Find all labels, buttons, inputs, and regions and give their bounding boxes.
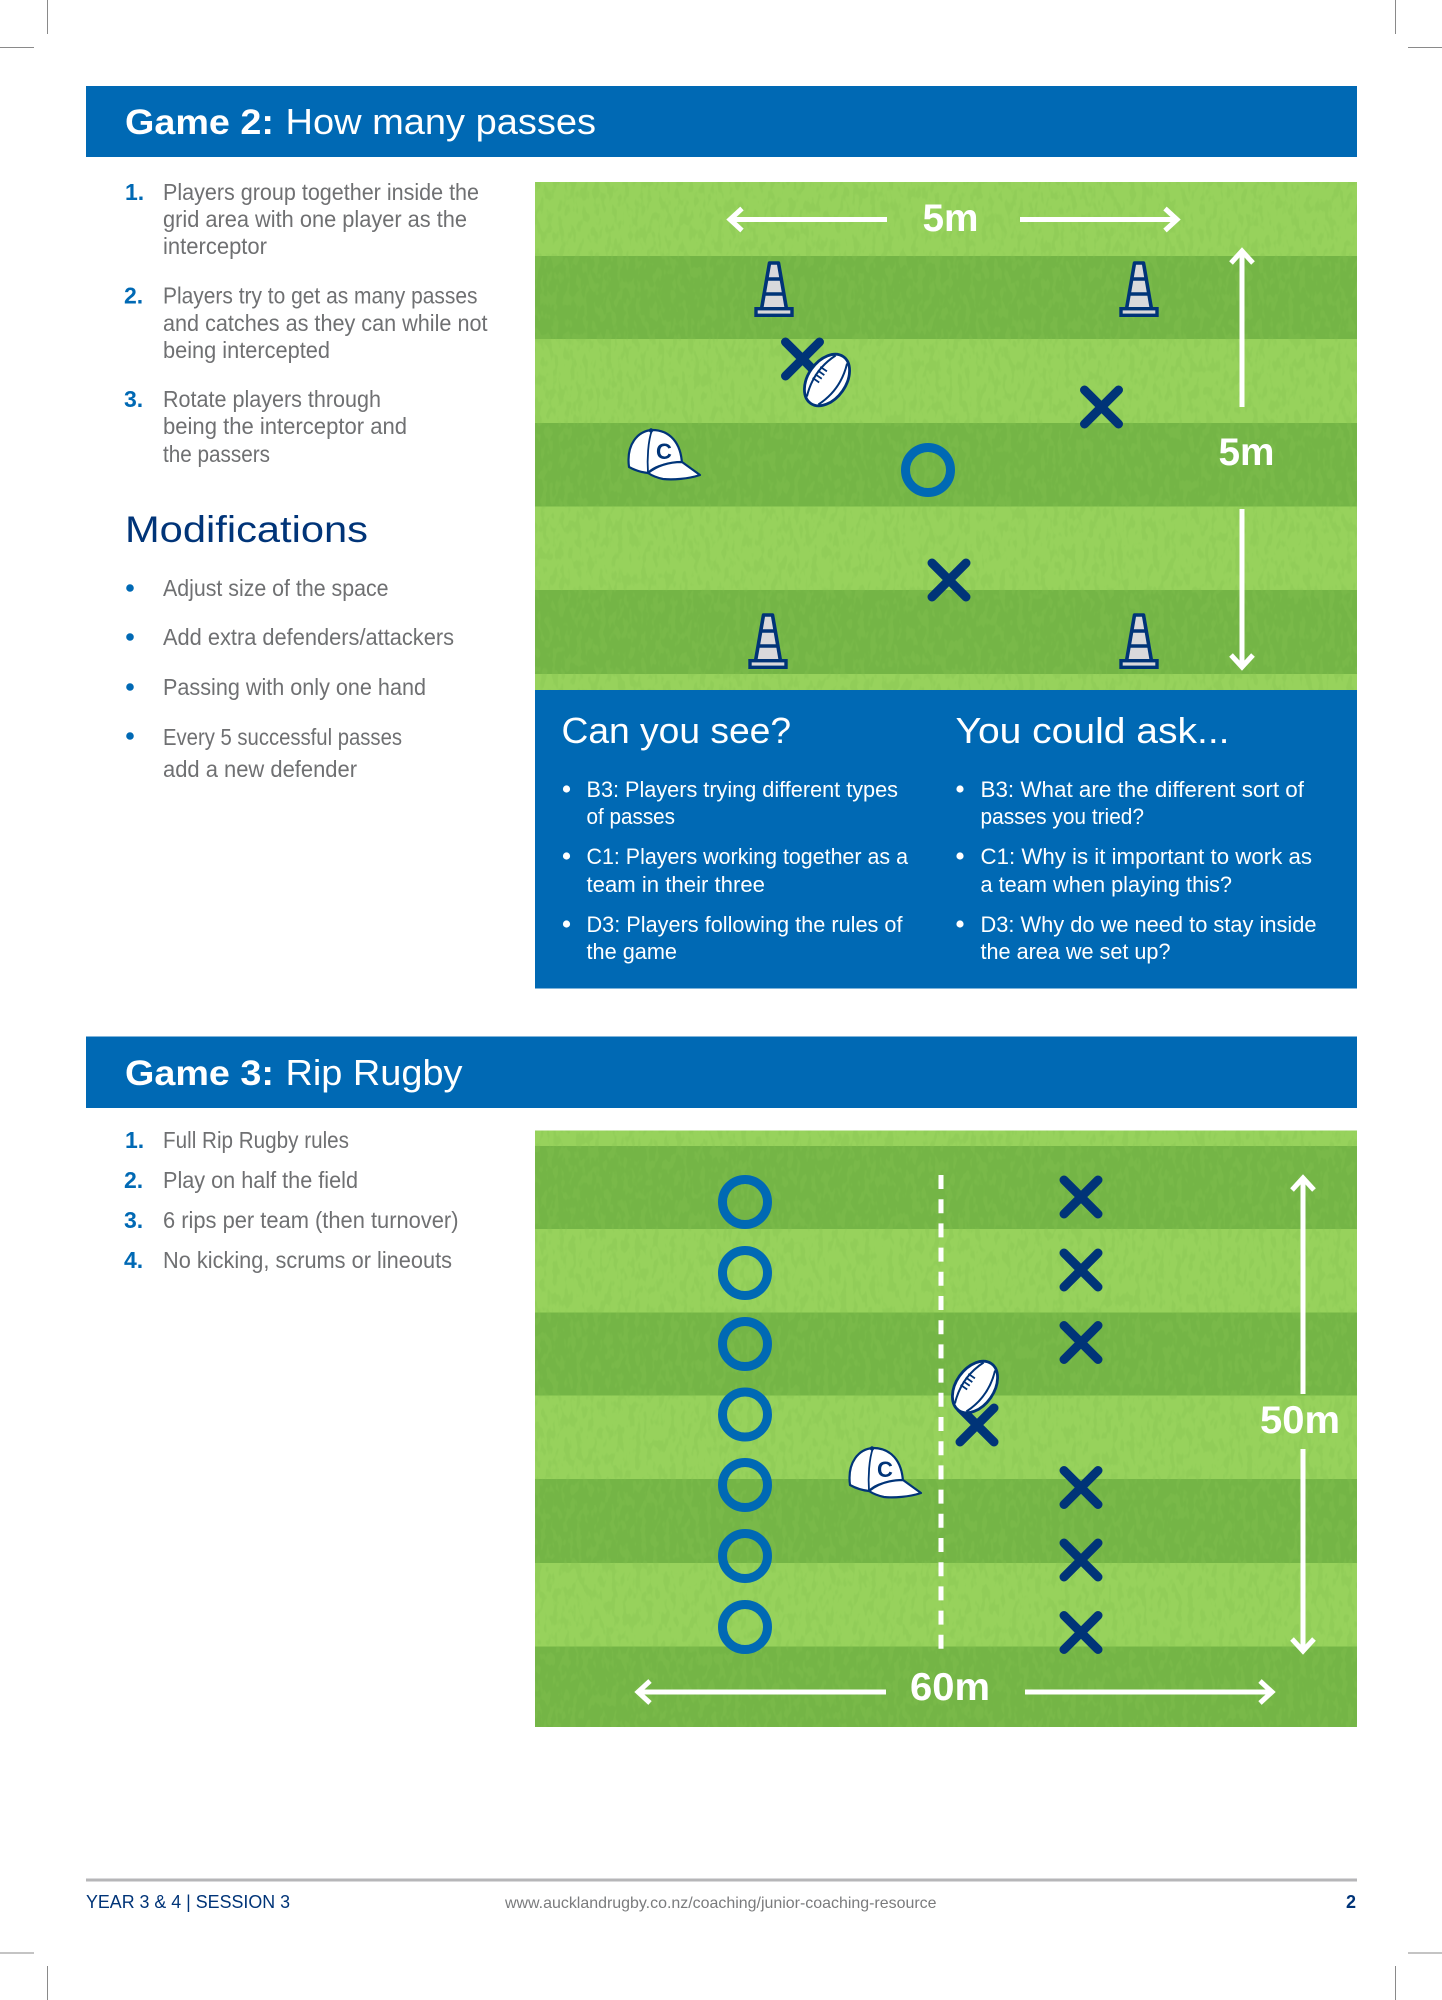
modifications list: add a new defender <box>163 756 357 782</box>
numbered instructions: Game 3: Play on half the field <box>163 1167 358 1193</box>
numbered instructions: Game 3: 4. <box>124 1247 143 1273</box>
icon: coach cap: C <box>877 1457 893 1482</box>
heading banner: Game 3 <box>86 1036 1357 1108</box>
modifications list: Passing with only one hand <box>163 674 426 700</box>
player X <box>1084 390 1118 424</box>
heading: Can you see?: Can you see? <box>562 710 791 751</box>
list: You could ask: B3: What are the different sort of <box>980 777 1305 802</box>
player X with ball <box>960 1408 994 1442</box>
icon: cone top left <box>756 263 792 315</box>
list: Can you see? <box>563 777 908 964</box>
list: Can you see?: the game <box>586 939 677 964</box>
numbered instructions: Game 2: grid area with one player as the <box>163 206 467 232</box>
modifications list: Adjust size of the space <box>163 575 388 601</box>
arrow: 60m left <box>638 1681 886 1703</box>
team X column <box>1064 1180 1098 1650</box>
arrow: 5m height down <box>1231 509 1253 667</box>
interceptor O <box>906 448 950 492</box>
label: 50m: 50m <box>1260 1399 1340 1442</box>
numbered instructions: Game 2 <box>124 179 488 467</box>
arrow: 5m width left <box>730 208 887 230</box>
numbered instructions: Game 2: Rotate players through <box>163 386 381 412</box>
icon: cone bottom left <box>750 615 786 667</box>
icon: cone top right <box>1121 263 1157 315</box>
label: 5m width: 5m <box>922 197 978 240</box>
list: You could ask: C1: Why is it important to work as <box>980 844 1312 869</box>
numbered instructions: Game 2: Players try to get as many passes <box>163 282 478 308</box>
arrow: 5m width right <box>1020 208 1177 230</box>
list: Can you see?: D3: Players following the rules of <box>586 912 903 937</box>
heading banner: Game 2: How many passes <box>286 101 596 142</box>
list: Can you see?: of passes <box>586 804 675 829</box>
numbered instructions: Game 3: 3. <box>124 1207 143 1233</box>
numbered instructions: Game 2: the passers <box>163 441 270 467</box>
list: You could ask: D3: Why do we need to stay inside <box>980 912 1316 937</box>
team O column <box>722 1180 768 1650</box>
modifications list: Every 5 successful passes <box>163 724 402 750</box>
modifications list: Add extra defenders/attackers <box>163 624 454 650</box>
numbered instructions: Game 2: being the interceptor and <box>163 413 407 439</box>
arrow: 50m up <box>1292 1178 1314 1394</box>
numbered instructions: Game 3 <box>124 1127 458 1273</box>
panel: questions <box>535 690 1357 988</box>
list: You could ask <box>956 777 1316 964</box>
arrow: 60m right <box>1025 1681 1272 1703</box>
numbered instructions: Game 2: 2. <box>124 282 143 308</box>
numbered instructions: Game 2: 1. <box>125 179 144 205</box>
numbered instructions: Game 3: Full Rip Rugby rules <box>163 1127 349 1153</box>
footer <box>86 1878 1357 1912</box>
icon: cone bottom right <box>1121 615 1157 667</box>
halfway dashed line <box>938 1175 944 1654</box>
icon: rugby ball <box>795 346 859 414</box>
numbered instructions: Game 2: 3. <box>124 386 143 412</box>
heading banner: Game 2 <box>86 86 1357 157</box>
player X with ball <box>786 342 820 376</box>
numbered instructions: Game 3: 6 rips per team (then turnover) <box>163 1207 458 1233</box>
icon: coach cap: C <box>656 439 672 464</box>
icon: rugby ball <box>943 1353 1007 1421</box>
numbered instructions: Game 2: being intercepted <box>163 337 330 363</box>
list: Can you see?: B3: Players trying different types <box>586 777 898 802</box>
footer: page number: 2 <box>1346 1892 1356 1912</box>
numbered instructions: Game 2: Players group together inside the <box>163 179 479 205</box>
player X <box>932 563 966 597</box>
heading banner: Game 2: Game 2: <box>125 103 274 142</box>
numbered instructions: Game 3: 1. <box>125 1127 144 1153</box>
heading: Modifications: Modifications <box>125 509 368 550</box>
diagram: Game 2 field <box>535 182 1357 691</box>
list: Can you see?: C1: Players working together as a <box>586 844 908 869</box>
list: You could ask: passes you tried? <box>980 804 1144 829</box>
footer: url: www.aucklandrugby.co.nz/coaching/junior-coaching-resource <box>504 1895 937 1912</box>
label: 60m: 60m <box>910 1666 990 1709</box>
numbered instructions: Game 2: and catches as they can while not <box>163 310 488 336</box>
arrow: 50m down <box>1292 1449 1314 1651</box>
list: You could ask: the area we set up? <box>980 939 1170 964</box>
list: Can you see?: team in their three <box>586 872 765 897</box>
numbered instructions: Game 2: interceptor <box>163 233 267 259</box>
numbered instructions: Game 3: No kicking, scrums or lineouts <box>163 1247 452 1273</box>
list: You could ask: a team when playing this? <box>980 872 1232 897</box>
label: 5m height: 5m <box>1218 431 1274 474</box>
heading: You could ask: You could ask... <box>956 710 1230 751</box>
icon: coach cap <box>850 1446 921 1497</box>
footer: session label: YEAR 3 & 4 | SESSION 3 <box>86 1892 290 1912</box>
heading banner: Game 3: Rip Rugby <box>286 1052 462 1093</box>
diagram: Game 3 field <box>535 1130 1357 1727</box>
modifications list <box>126 575 454 782</box>
heading banner: Game 3: Game 3: <box>125 1054 274 1093</box>
numbered instructions: Game 3: 2. <box>124 1167 143 1193</box>
icon: coach cap <box>629 428 700 479</box>
arrow: 5m height up <box>1231 251 1253 407</box>
